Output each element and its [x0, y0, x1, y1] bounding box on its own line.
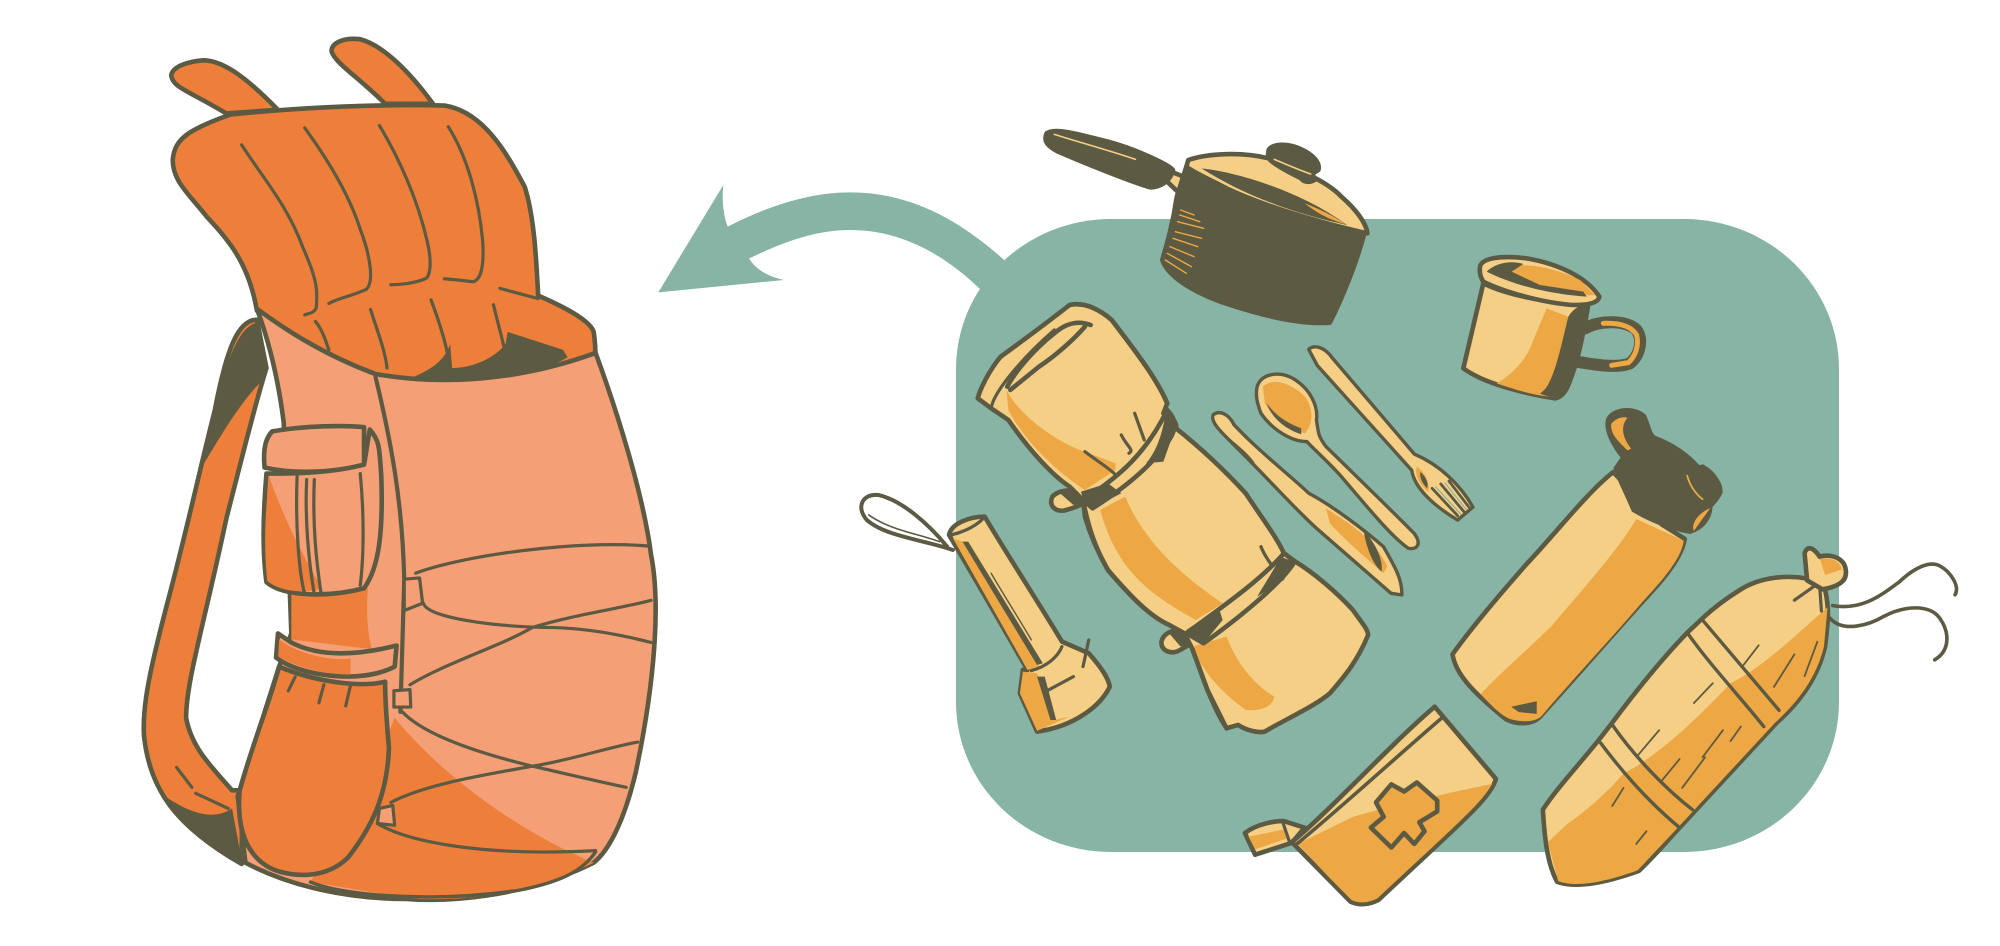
illustration: cooking pot [1045, 131, 1367, 323]
backpack main body [238, 309, 656, 900]
backpack compression straps [377, 545, 651, 852]
backpack padded back panel [173, 105, 596, 386]
illustration: knife [1213, 413, 1402, 595]
illustration: fork [1309, 347, 1473, 520]
illustration: backpack [144, 39, 656, 900]
illustration: flashlight [861, 495, 1110, 732]
panel: teal rounded background [956, 219, 1839, 852]
illustration: tied sleeping pad [1543, 548, 1956, 885]
backpack large lower pocket [239, 633, 397, 875]
backpack top straps [171, 39, 433, 113]
illustration: water bottle [1453, 410, 1720, 723]
illustration: first aid pouch [1245, 707, 1496, 904]
illustration: rolled sleeping bag [978, 304, 1368, 732]
backpack shoulder strap [144, 320, 266, 864]
illustration: enamel mug [1463, 257, 1640, 398]
backpack small pocket [264, 426, 382, 594]
arrow: curved arrow pointing to backpack [658, 185, 1023, 293]
illustration: spoon [1256, 374, 1418, 549]
